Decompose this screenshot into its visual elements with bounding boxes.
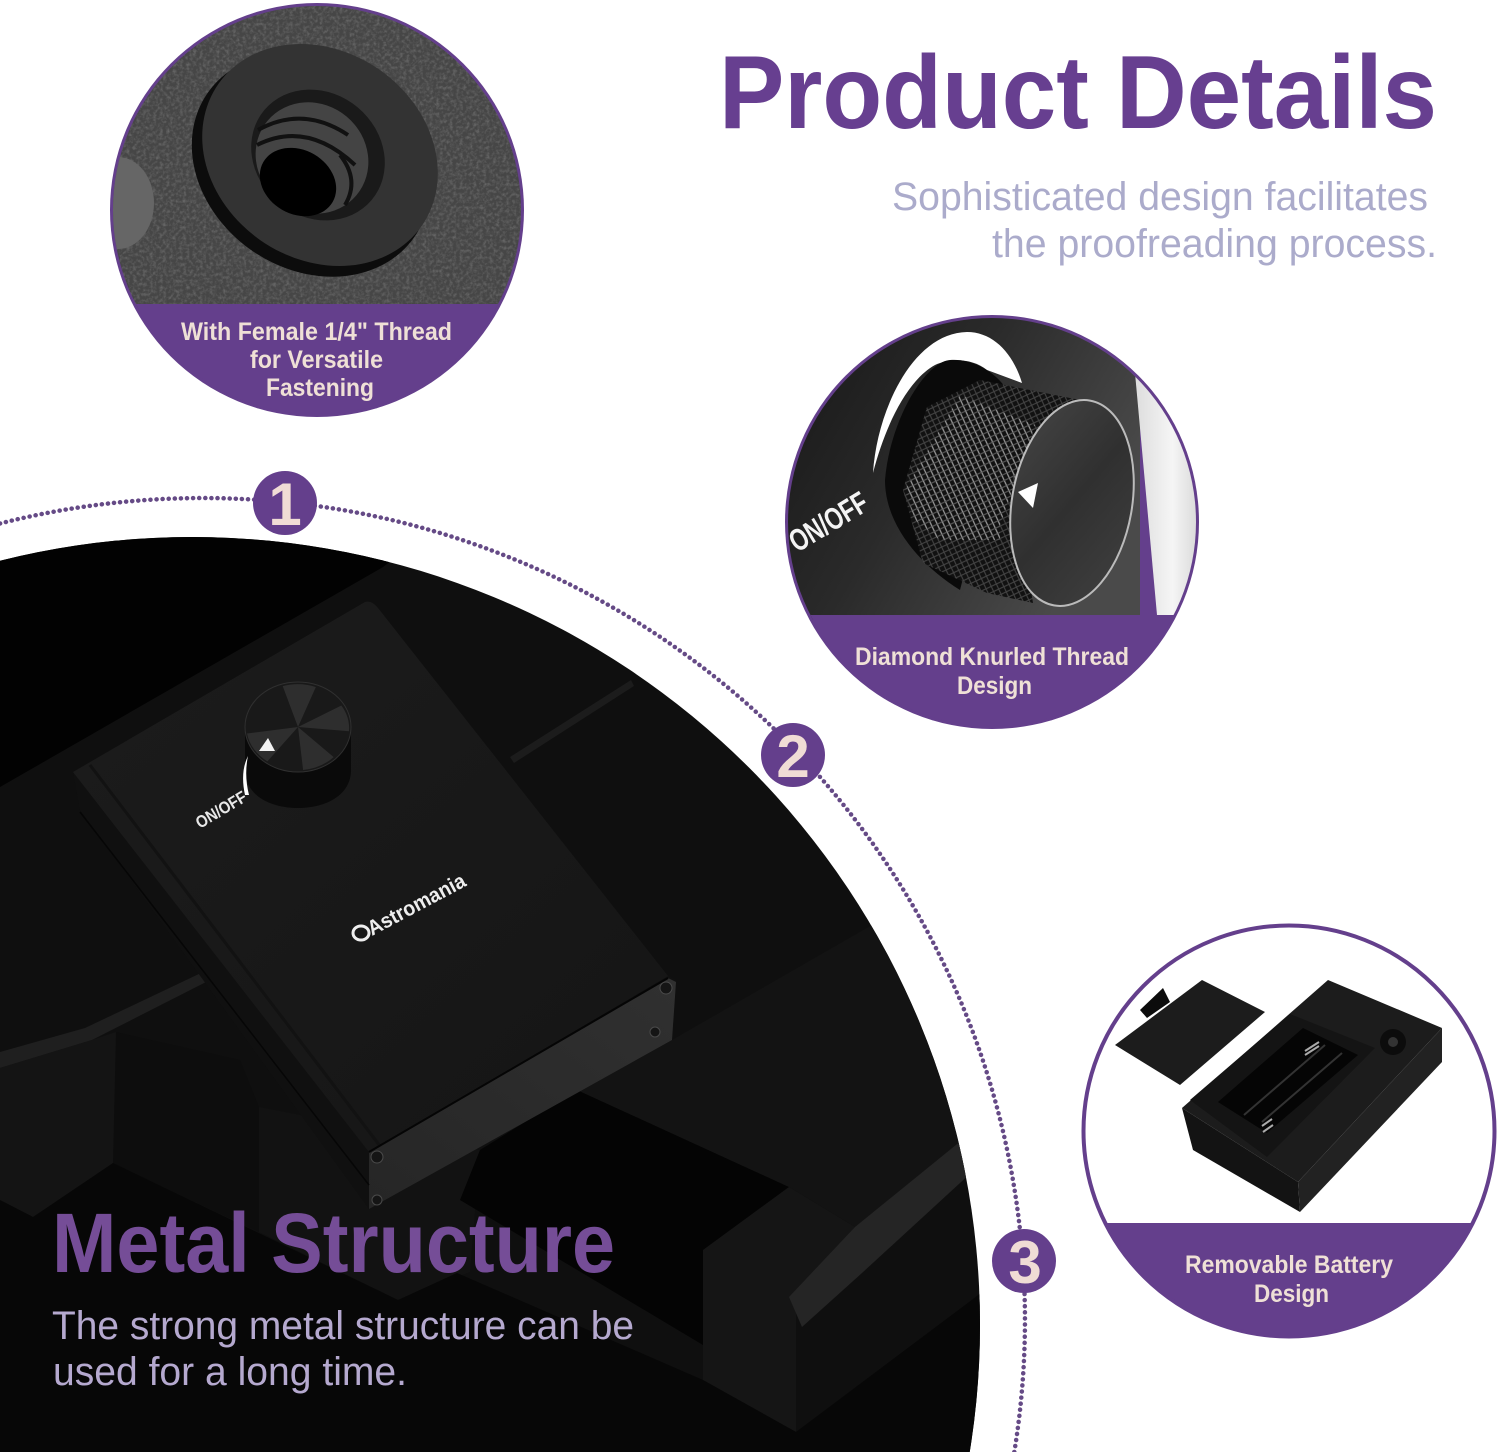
main black circular photo	[0, 530, 1000, 1452]
knob	[245, 682, 351, 808]
caption: thread: With Female 1/4" Thread	[181, 318, 452, 346]
subtitle	[892, 175, 1437, 266]
text: metal structure description: The strong metal structure can be	[52, 1304, 634, 1348]
caption: thread: for Versatile	[250, 346, 383, 374]
dotted arc connector	[0, 498, 1025, 1452]
panel: battery detail	[1080, 926, 1500, 1343]
caption: thread	[181, 318, 452, 402]
brand logo: Astromania	[364, 869, 470, 940]
on/off print: ON/OFF	[783, 485, 874, 559]
panel: knob detail	[780, 310, 1210, 735]
caption: battery	[1185, 1251, 1393, 1308]
panel: thread detail	[110, 3, 524, 417]
step marker 2: 2	[776, 723, 810, 790]
subtitle: Sophisticated design facilitates	[892, 175, 1428, 219]
icon: knurled knob	[885, 360, 1149, 616]
caption: thread: Fastening	[266, 374, 374, 402]
caption: knob	[855, 643, 1129, 700]
step marker 2	[761, 723, 825, 790]
caption: battery: Design	[1254, 1280, 1329, 1308]
product: metal box	[73, 602, 676, 1209]
white arc mark	[243, 756, 249, 795]
caption: knob: Diamond Knurled Thread	[855, 643, 1129, 671]
caption: battery: Removable Battery	[1185, 1251, 1393, 1279]
icon: threaded mount	[192, 44, 438, 277]
screws	[371, 982, 672, 1205]
heading: metal structure: Metal Structure	[52, 1196, 615, 1290]
step marker 3: 3	[1008, 1229, 1042, 1296]
step marker 1	[253, 471, 317, 538]
title: Product Details	[719, 35, 1437, 151]
step marker 3	[992, 1229, 1056, 1296]
icon: white arc	[873, 332, 1022, 473]
icon: battery cover	[1115, 980, 1265, 1085]
screw at left edge	[113, 158, 154, 249]
subtitle: the proofreading process.	[992, 222, 1437, 266]
on/off label: ON/OFF	[192, 787, 250, 832]
text: metal structure description	[52, 1304, 634, 1394]
caption: knob: Design	[957, 672, 1032, 700]
text: metal structure description: used for a long time.	[53, 1350, 407, 1394]
step marker 1: 1	[268, 471, 302, 538]
background rails	[0, 530, 985, 1452]
icon: open battery case	[1182, 980, 1442, 1212]
